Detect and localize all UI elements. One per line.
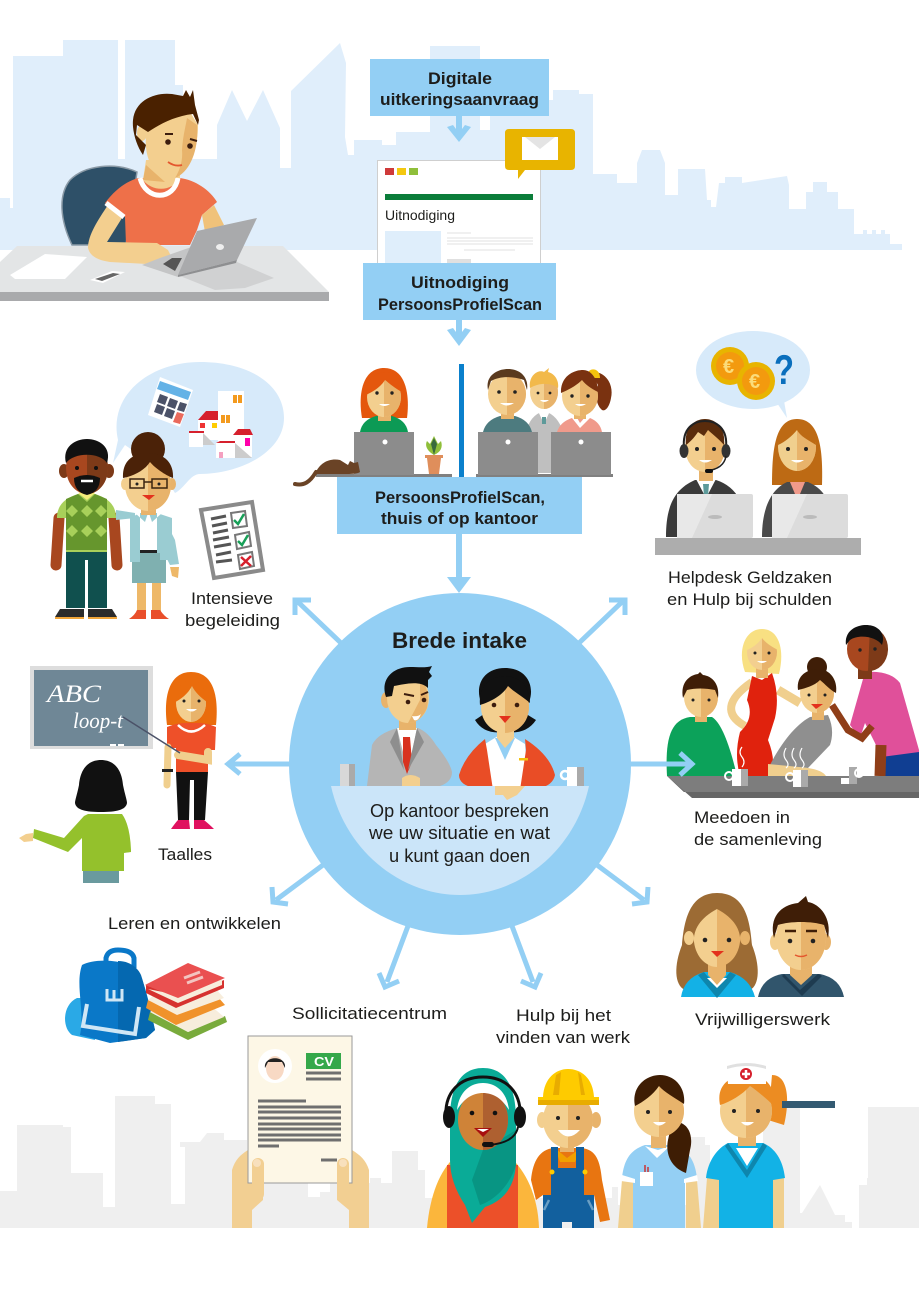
scene: leren en ontwikkelen [65, 914, 281, 1043]
shirt [105, 178, 217, 245]
shadow of laptop [180, 262, 274, 290]
blackboard: ABC [45, 681, 101, 708]
office laptops and shelf [476, 432, 613, 477]
box: persoonsprofielscan thuis of op kantoor: thuis of op kantoor [381, 509, 538, 528]
thought bubble with coins: € [749, 371, 760, 393]
cups [725, 767, 863, 787]
desk [0, 246, 329, 301]
scene: hulp bij het vinden van werk [427, 1006, 835, 1228]
pointer [123, 717, 180, 753]
label: Leren en ontwikkelen [108, 914, 281, 933]
arrow: helpdesk [579, 600, 625, 643]
arrow down to scan [447, 320, 471, 346]
colleagues: woman [557, 369, 612, 432]
papers [10, 254, 87, 279]
arrow: vrijwilligerswerk [597, 865, 648, 904]
nurse with ponytail [618, 1075, 701, 1228]
panel: brede intake circle [289, 593, 631, 935]
houses [189, 391, 253, 458]
woman with long hair [676, 893, 758, 998]
plant [425, 436, 443, 474]
scene: meedoen in de samenleving [630, 625, 919, 849]
man in pink [832, 625, 919, 776]
box: digitale uitkeringsaanvraag: uitkeringsaanvraag [380, 90, 539, 109]
arrow: meedoen [630, 753, 692, 775]
man with dark shirt [758, 896, 844, 997]
woman in grey [768, 657, 836, 776]
scene: taalles [19, 666, 217, 883]
box: uitnodiging persoonsprofielscan: Uitnodiging [411, 273, 509, 292]
construction worker [531, 1069, 610, 1228]
woman with glasses [116, 432, 179, 619]
box: digitale uitkeringsaanvraag [370, 59, 549, 116]
teacher [162, 672, 217, 829]
student from behind [19, 760, 131, 883]
scene: helpdesk geldzaken [655, 331, 861, 609]
label: Hulp bij het [516, 1006, 611, 1025]
cv paper [248, 1036, 352, 1183]
label: Taalles [158, 845, 212, 864]
box: uitnodiging persoonsprofielscan [363, 263, 556, 320]
arrow: intensieve begeleiding [295, 600, 341, 643]
invitation document: Uitnodiging [385, 207, 455, 223]
label: vinden van werk [496, 1028, 631, 1047]
table bowl [331, 786, 589, 895]
arrow down to invitation [447, 116, 471, 142]
stack of books [145, 963, 227, 1040]
shelf and laptop at home [316, 432, 452, 477]
cv paper: CV [314, 1054, 334, 1069]
blackboard [30, 666, 153, 749]
sleeve band [106, 203, 124, 217]
arrow: taalles [228, 754, 290, 774]
intake text: we uw situatie en wat [368, 823, 550, 843]
head [133, 90, 199, 178]
collar [140, 178, 178, 195]
label: Helpdesk Geldzaken [668, 568, 832, 587]
chair [62, 166, 137, 245]
helpdesk laptops [677, 494, 848, 538]
label: en Hulp bij schulden [667, 590, 832, 609]
thought bubble [113, 362, 284, 493]
checklist [201, 502, 263, 578]
scene: sollicitatiecentrum [232, 1004, 447, 1228]
colleagues: suit [526, 368, 563, 473]
thumbs [252, 1158, 349, 1200]
thought bubble with coins: ? [774, 346, 794, 393]
arrow: sollicitatiecentrum [379, 926, 408, 987]
cup left [340, 764, 355, 786]
thought bubble with coins [696, 331, 810, 418]
label: de samenleving [694, 830, 822, 849]
laptop [142, 218, 257, 277]
icon: mail speech bubble [505, 129, 575, 179]
arrows radiating from circle [228, 600, 648, 987]
bottom skyline background [0, 1096, 919, 1228]
woman at home [360, 368, 408, 432]
arrow down to circle [447, 534, 471, 593]
colleagues: man [483, 369, 532, 432]
heading: Brede intake [392, 628, 527, 653]
man with goatee [55, 439, 117, 618]
dark bar behind nurse [782, 1101, 835, 1108]
thought bubble with coins: € [723, 356, 734, 378]
cat [295, 460, 360, 484]
green sweater boy [667, 672, 737, 776]
scene: vrijwilligerswerk [676, 893, 844, 1029]
near arm [88, 205, 172, 265]
label [694, 808, 822, 849]
intake text: u kunt gaan doen [389, 846, 530, 866]
label [667, 568, 832, 609]
intake text [368, 801, 550, 866]
divider line [459, 364, 464, 477]
backpack [65, 950, 155, 1043]
table [667, 776, 919, 798]
helpdesk woman [762, 419, 827, 537]
box: uitnodiging persoonsprofielscan: PersoonsProfielScan [378, 295, 542, 314]
label: begeleiding [185, 611, 280, 630]
scene: intensieve begeleiding [55, 362, 284, 630]
helpdesk man [666, 419, 740, 537]
label: Sollicitatiecentrum [292, 1004, 447, 1023]
top skyline background [0, 40, 902, 250]
man in suit [367, 666, 452, 788]
scene: scan at home and at office [295, 364, 613, 484]
blackboard: loop-t [73, 708, 124, 733]
label [185, 589, 280, 630]
intake text: Op kantoor bespreken [370, 801, 549, 821]
box: persoonsprofielscan thuis of op kantoor [337, 477, 582, 534]
label: Vrijwilligerswerk [695, 1010, 831, 1029]
steam [740, 747, 804, 768]
right hand [337, 1150, 369, 1228]
calculator [148, 377, 193, 427]
cup right [561, 767, 584, 786]
label [496, 1006, 631, 1047]
box: digitale uitkeringsaanvraag: Digitale [428, 69, 492, 88]
box: persoonsprofielscan thuis of op kantoor: PersoonsProfielScan, [375, 488, 545, 507]
scene: person at laptop behind desk [0, 90, 329, 301]
arrow: leren [272, 865, 323, 904]
scrub nurse with cap [703, 1063, 787, 1228]
far arm [202, 205, 224, 232]
arrow: hulp bij werk [512, 926, 541, 987]
label: Meedoen in [694, 808, 790, 827]
blonde woman [731, 629, 800, 776]
woman with red jacket [459, 668, 555, 793]
invitation document [378, 160, 540, 264]
neck [143, 160, 180, 189]
call centre woman with hijab [427, 1068, 539, 1228]
phone [90, 271, 125, 283]
left hand [232, 1150, 263, 1228]
helpdesk desk [655, 538, 861, 555]
hands on table [495, 786, 525, 800]
label: Intensieve [191, 589, 273, 608]
